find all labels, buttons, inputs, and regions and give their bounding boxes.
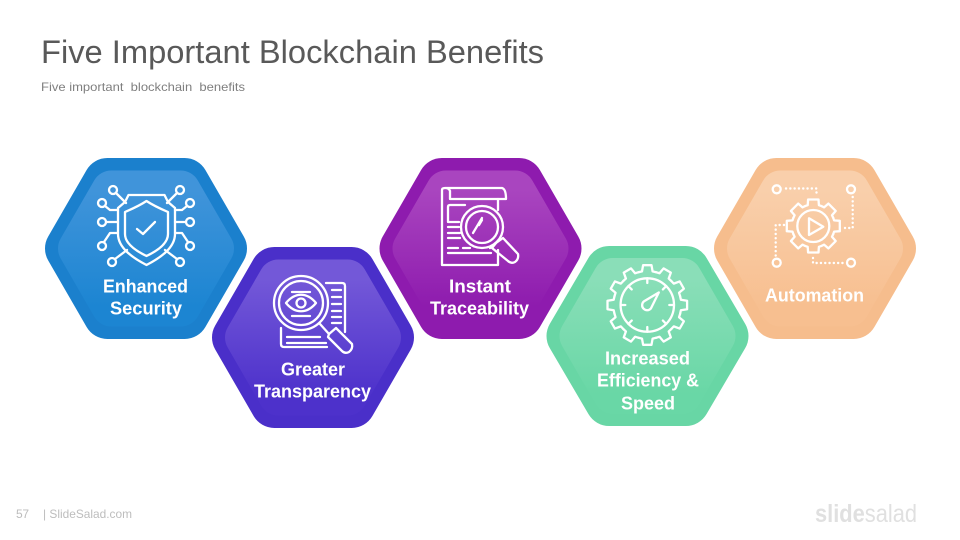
label: Increased xyxy=(605,348,690,368)
icon: magnifier with eye over document xyxy=(274,276,352,353)
panel: Increased Efficiency and Speed hexagon xyxy=(570,265,724,414)
icon: shield with circuit nodes xyxy=(98,186,194,266)
label: Automation xyxy=(765,286,864,306)
title: Five Important Blockchain Benefits xyxy=(41,34,544,70)
page number: 57 xyxy=(16,507,29,521)
label xyxy=(597,348,699,414)
label: Transparency xyxy=(254,382,371,402)
panel: Greater Transparency hexagon xyxy=(236,271,390,404)
logo wordmark: slidesalad xyxy=(815,500,917,528)
label: Security xyxy=(110,298,182,318)
subtitle: Five important blockchain benefits xyxy=(41,80,245,94)
panel: Enhanced Security hexagon xyxy=(69,182,223,318)
panel: Instant Traceability hexagon xyxy=(404,182,558,318)
label: Greater xyxy=(281,360,345,380)
footer source: | SlideSalad.com xyxy=(43,507,132,521)
label: Efficiency & xyxy=(597,370,699,390)
icon: gear with play button and dotted paths xyxy=(773,185,855,267)
label: Traceability xyxy=(430,298,529,318)
label xyxy=(254,360,371,402)
label xyxy=(430,276,529,318)
label: Speed xyxy=(621,394,675,414)
label xyxy=(103,276,188,318)
icon: document with magnifier xyxy=(442,188,518,265)
label: Enhanced xyxy=(103,276,188,296)
icon: gear with speed gauge xyxy=(608,265,687,345)
panel: Automation hexagon xyxy=(738,182,892,315)
label: Instant xyxy=(449,276,511,296)
